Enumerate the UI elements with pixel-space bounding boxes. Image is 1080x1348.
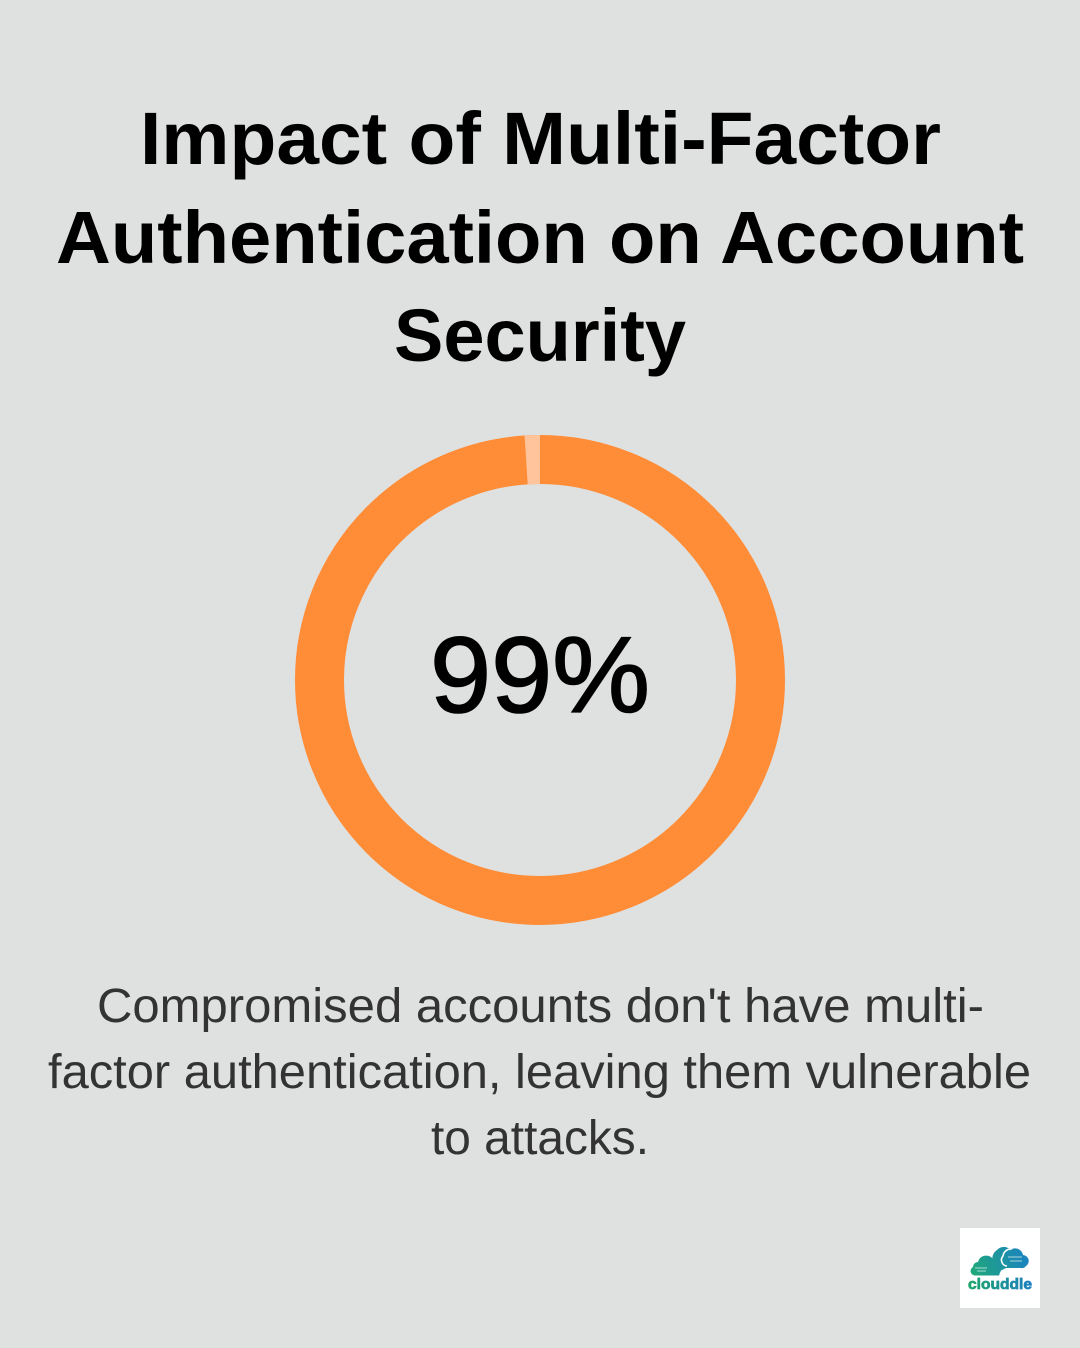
description text: factor authentication, leaving them vulnerable [48, 1046, 1031, 1099]
description text: to attacks. [431, 1112, 649, 1165]
icon: clouds [971, 1247, 1029, 1276]
title [56, 97, 1024, 377]
logo: clouddle [960, 1228, 1040, 1308]
title: Authentication on Account [56, 196, 1024, 279]
donut value: 99% [430, 614, 650, 735]
donut chart [320, 460, 760, 900]
logo wordmark: clouddle [968, 1276, 1032, 1293]
description text [48, 980, 1031, 1165]
title: Security [394, 294, 686, 377]
description text: Compromised accounts don't have multi- [97, 980, 984, 1033]
title: Impact of Multi-Factor [140, 97, 941, 180]
